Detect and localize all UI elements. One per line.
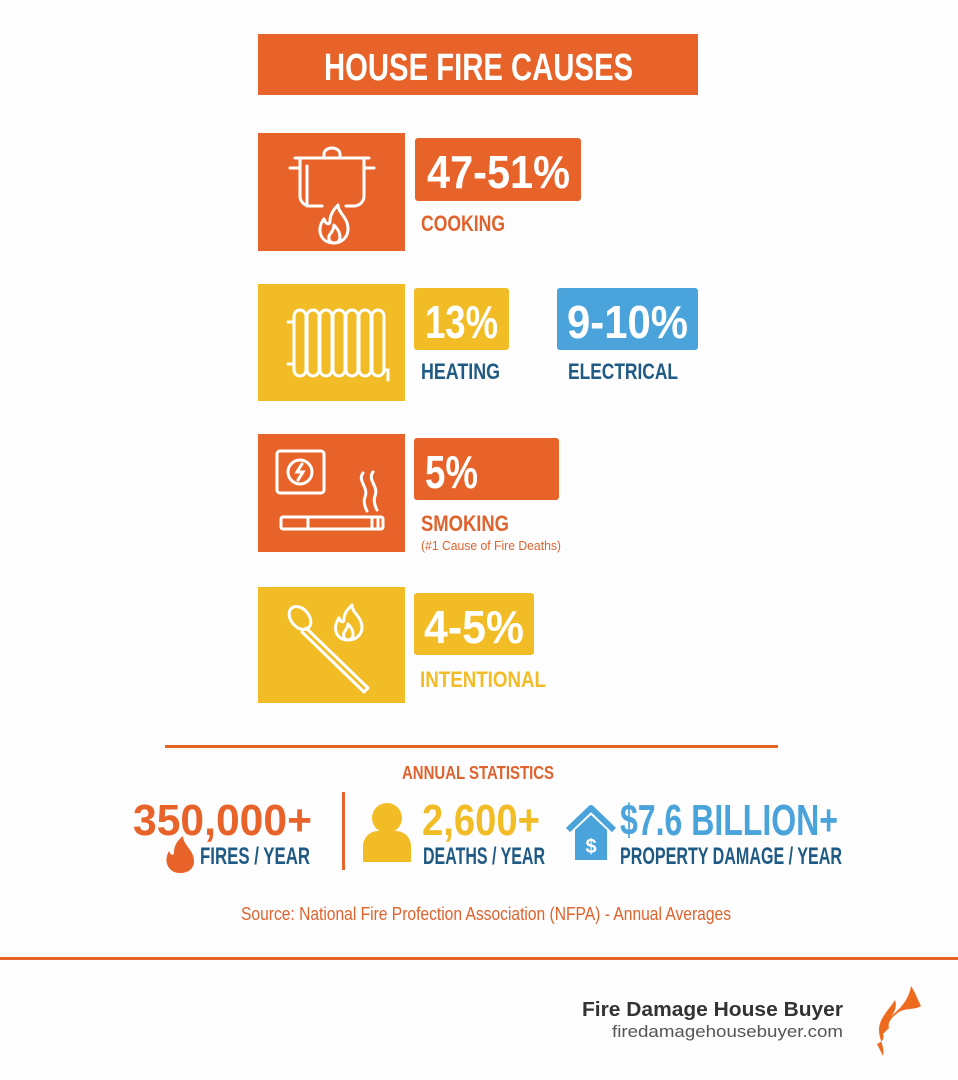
footer brand: [582, 999, 843, 1041]
stat: deaths: DEATHS / YEAR: [423, 843, 545, 870]
title: HOUSE FIRE CAUSES: [324, 47, 633, 89]
footer brand: firedamagehousebuyer.com: [612, 1022, 843, 1041]
panel: heating and electrical: [258, 284, 698, 401]
heading: annual statistics: ANNUAL STATISTICS: [402, 763, 554, 783]
icon: match and flame: [258, 587, 405, 703]
source text: Source: National Fire Profection Association (NFPA) - Annual Averages: [241, 904, 731, 924]
stat: deaths: [363, 796, 545, 870]
stat: property damage: $7.6 BILLION+: [620, 796, 838, 845]
stat: fires: [133, 796, 312, 873]
stat: fires: FIRES / YEAR: [200, 843, 310, 870]
panel: cooking: [258, 133, 581, 251]
icon: house with dollar: $: [585, 836, 597, 858]
badge: 13%: 13%: [425, 296, 498, 348]
badge: 4-5%: 4-5%: [424, 601, 524, 653]
panel: intentional: [258, 587, 546, 703]
stat: property damage: [568, 796, 842, 870]
badge: 13%: [414, 288, 509, 350]
label: electrical: ELECTRICAL: [568, 359, 678, 384]
label: smoking: SMOKING: [421, 511, 509, 536]
title: [258, 34, 698, 95]
icon: radiator: [258, 284, 405, 401]
stat: fires: 350,000+: [133, 796, 312, 845]
icon: flame: [166, 836, 194, 873]
panel: smoking: [258, 434, 561, 553]
stat: property damage: PROPERTY DAMAGE / YEAR: [620, 843, 842, 870]
badge: 9-10%: 9-10%: [567, 296, 688, 348]
icon: pot on fire: [258, 133, 405, 251]
badge: 5%: 5%: [425, 446, 478, 498]
label: intentional: INTENTIONAL: [420, 667, 546, 692]
label: heating: HEATING: [421, 359, 500, 384]
icon: person: [363, 803, 411, 862]
icon: house with dollar: [568, 808, 614, 860]
badge: 47-51%: 47-51%: [427, 146, 570, 198]
icon: cigarette and outlet: [258, 434, 405, 552]
badge: 5%: [414, 438, 559, 500]
note: #1 cause of fire deaths: (#1 Cause of Fire Deaths): [421, 538, 561, 553]
logo: flame: [877, 986, 921, 1056]
footer brand: Fire Damage House Buyer: [582, 999, 843, 1021]
stat: deaths: 2,600+: [422, 796, 540, 845]
label: cooking: COOKING: [421, 211, 505, 236]
